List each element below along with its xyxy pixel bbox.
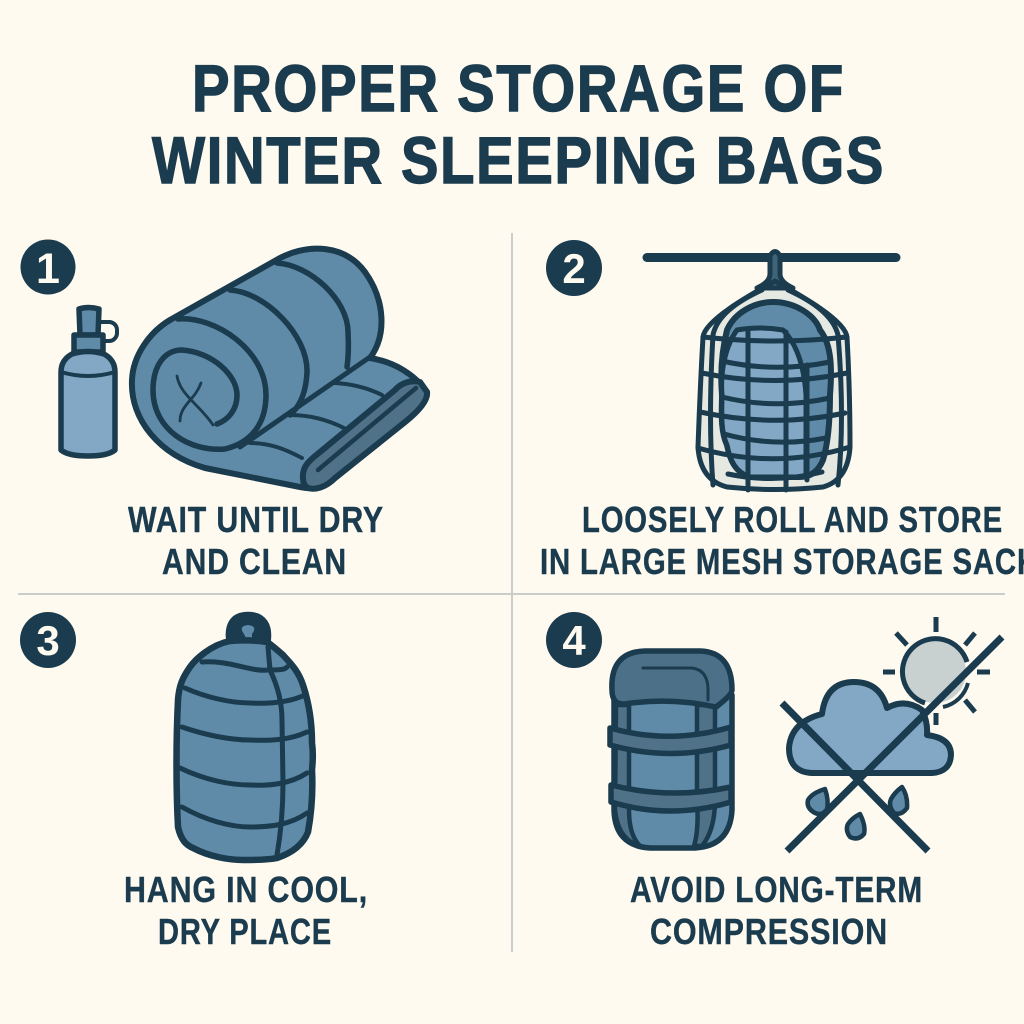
step 4 caption bbox=[630, 869, 923, 952]
step 3 caption bbox=[124, 869, 368, 952]
panel: step 2 loosely roll and store bbox=[540, 240, 1024, 582]
icon: compressed bag with straps bbox=[610, 651, 732, 848]
icon: bag hanging in mesh sack bbox=[647, 252, 896, 490]
step 1 caption: AND CLEAN bbox=[162, 541, 347, 582]
number badge 4 bbox=[546, 612, 602, 668]
step 1 caption bbox=[128, 499, 384, 582]
sun and rays bbox=[883, 617, 990, 725]
icon: crossed-out weather bbox=[782, 617, 1002, 851]
title: WINTER SLEEPING BAGS bbox=[152, 123, 885, 197]
step 3 caption: DRY PLACE bbox=[158, 911, 332, 952]
number badge 3: 3 bbox=[36, 617, 60, 664]
number badge 3 bbox=[20, 612, 76, 668]
icon: rolled sleeping bag bbox=[132, 249, 427, 489]
panel: step 3 hang in cool dry place bbox=[20, 612, 368, 952]
prohibition cross bbox=[782, 637, 1002, 851]
number badge 1 bbox=[20, 240, 76, 294]
number badge 4: 4 bbox=[562, 617, 586, 664]
water drops bbox=[808, 787, 907, 838]
icon: spray bottle bbox=[61, 308, 117, 456]
number badge 2 bbox=[546, 240, 602, 296]
title: PROPER STORAGE OF bbox=[192, 51, 845, 125]
cloud bbox=[789, 682, 951, 773]
panel: step 4 avoid long-term compression bbox=[546, 612, 1002, 952]
step 3 caption: HANG IN COOL, bbox=[124, 869, 368, 910]
step 4 caption: AVOID LONG-TERM bbox=[630, 869, 923, 910]
icon: hanging stuff bag bbox=[176, 615, 313, 860]
number badge 1: 1 bbox=[36, 245, 60, 293]
step 4 caption: COMPRESSION bbox=[650, 911, 888, 952]
title bbox=[152, 51, 885, 197]
step 2 caption bbox=[540, 499, 1024, 582]
panel: step 1 wait until dry and clean bbox=[20, 240, 427, 582]
number badge 2: 2 bbox=[562, 245, 586, 292]
step 1 caption: WAIT UNTIL DRY bbox=[128, 499, 384, 540]
